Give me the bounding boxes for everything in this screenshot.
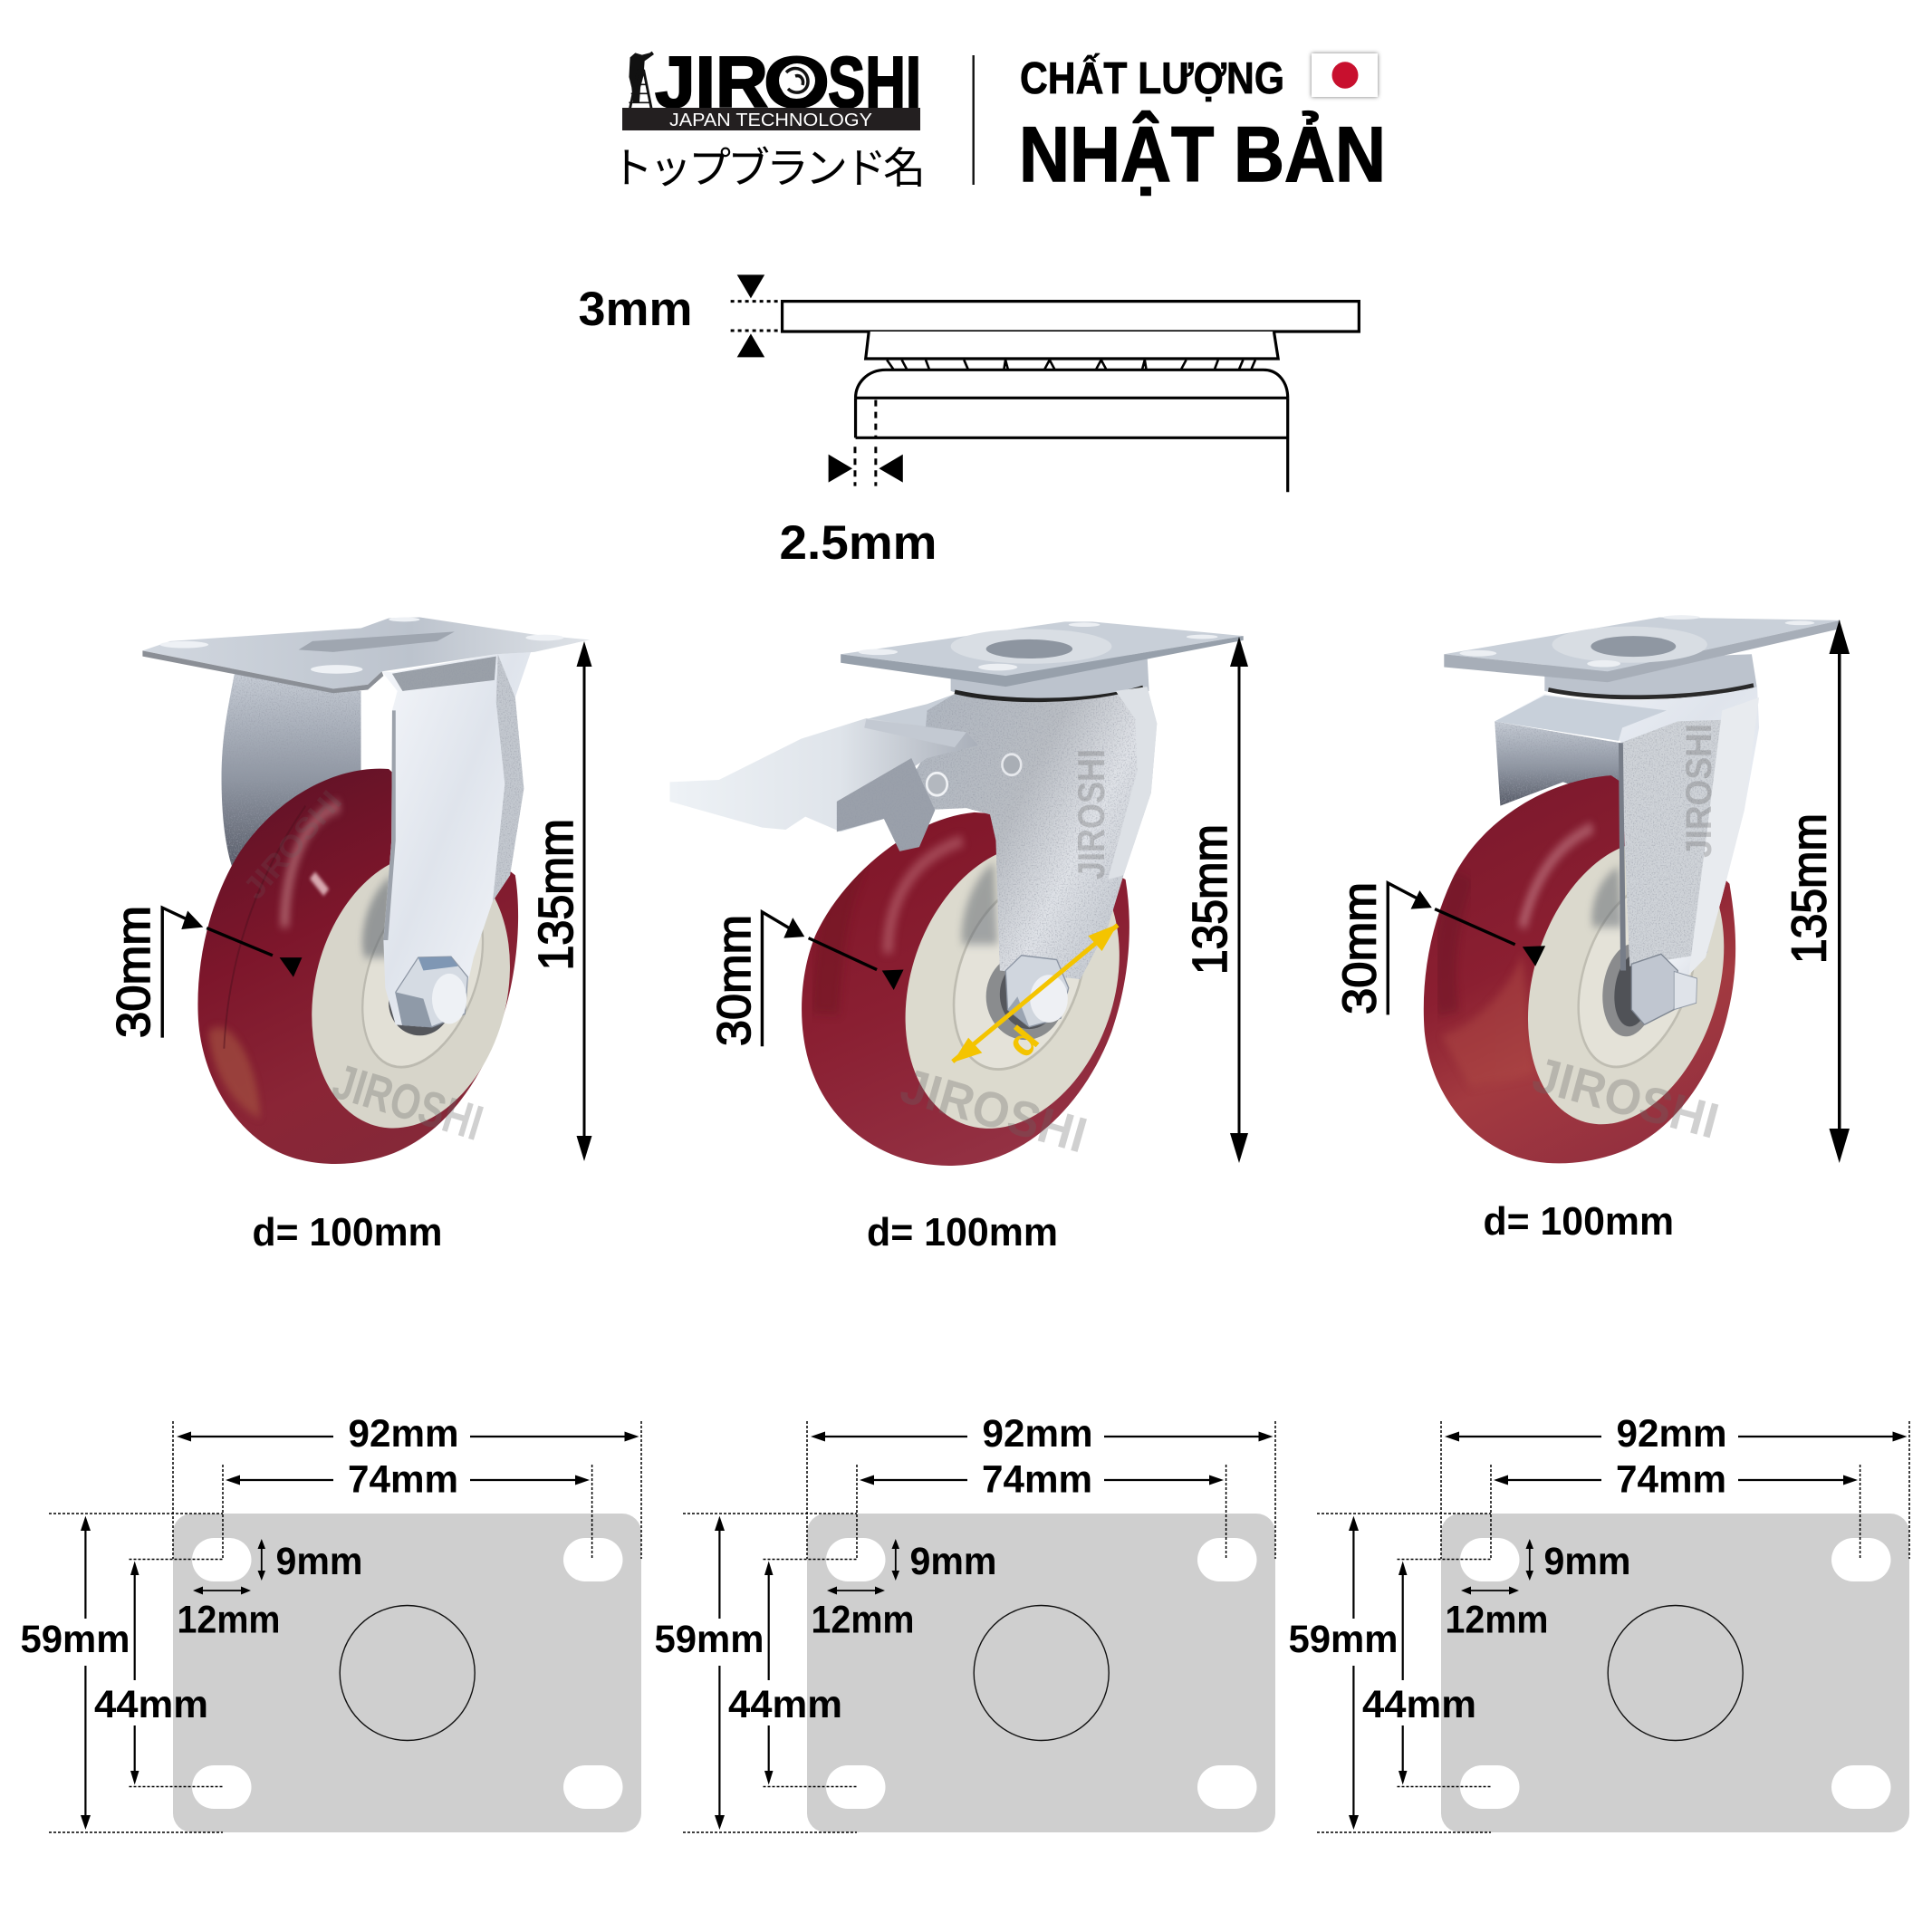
dimension: 59mm (1288, 1516, 1399, 1830)
logo tagline: JAPAN TECHNOLOGY (669, 111, 872, 130)
dimension: 135mm height (1783, 620, 1850, 1163)
dimension: 12mm: 12mm (812, 1598, 915, 1641)
dimension: 92mm (1445, 1412, 1908, 1456)
profile drawing (731, 274, 1359, 492)
caster photo: swivel (1424, 615, 1841, 1163)
panel: mounting plate 3 (1288, 1412, 1909, 1832)
divider (973, 55, 975, 185)
label: yellow d: d (998, 1018, 1048, 1065)
dimension: 135mm height (1183, 637, 1248, 1163)
wheel watermark: JIROSHI (1527, 1046, 1725, 1149)
dimension: 30mm width (108, 906, 302, 1038)
dimension: 44mm (1362, 1562, 1476, 1784)
dimension: 92mm: 92mm (982, 1412, 1092, 1456)
dimension: 135mm height: 135mm (529, 819, 583, 971)
tire watermark: JIROSHI (236, 784, 349, 906)
panel: mounting plate 2 (654, 1412, 1275, 1832)
logo wordmark O with swirl: O (764, 42, 830, 122)
dimension: 74mm (860, 1458, 1224, 1502)
dimension: 59mm: 59mm (1288, 1618, 1399, 1661)
plate shape (173, 1514, 641, 1832)
panel: mounting plate 1 (20, 1412, 641, 1832)
dimension: 30mm width (1333, 882, 1545, 1014)
dimension: 92mm: 92mm (1616, 1412, 1726, 1456)
guide lines (683, 1421, 1275, 1832)
dimension: 74mm (226, 1458, 590, 1502)
japanese tagline: トップブランド名 (610, 144, 926, 192)
dimension: 74mm: 74mm (982, 1458, 1092, 1502)
dimension: 59mm (654, 1516, 764, 1830)
dimension: 59mm: 59mm (654, 1618, 764, 1661)
plate shape (1441, 1514, 1909, 1832)
dimension: 92mm (177, 1412, 639, 1456)
heading: nhật bản: NHẬT BẢN (1019, 111, 1386, 198)
logo wordmark SHI: SHI (828, 42, 921, 122)
dimension: 44mm: 44mm (94, 1683, 208, 1726)
dimension: 12mm: 12mm (178, 1598, 281, 1641)
section profile diagram: plate and wheel thickness (578, 274, 1359, 570)
dimension: 9mm: 9mm (909, 1540, 996, 1583)
panel: swivel caster (1333, 615, 1850, 1244)
dimension: 74mm (1494, 1458, 1858, 1502)
icon: japan flag (1312, 53, 1378, 97)
dimension: 44mm (728, 1562, 842, 1784)
label: diameter: d= 100mm (252, 1210, 442, 1254)
panel: swivel caster with brake (670, 621, 1248, 1254)
header: brand and quality badge (610, 42, 1386, 198)
caster photo: fixed (142, 618, 590, 1174)
dimension: 135mm height: 135mm (1783, 813, 1837, 964)
dimension: 44mm: 44mm (1362, 1683, 1476, 1726)
dimension: 92mm: 92mm (348, 1412, 458, 1456)
wheel watermark: JIROSHI (895, 1057, 1093, 1163)
panel: fixed caster (108, 618, 592, 1254)
dimension: 9mm: 9mm (275, 1540, 362, 1583)
dimension: 74mm: 74mm (348, 1458, 458, 1502)
plate shape (807, 1514, 1275, 1832)
logo bar (622, 108, 920, 130)
logo icon: man on ladder (627, 52, 654, 118)
label: 2.5mm: 2.5mm (779, 516, 937, 570)
logo: JIROSHI (622, 42, 921, 130)
bracket watermark: JIROSHI (1070, 749, 1112, 879)
guide lines (49, 1421, 641, 1832)
dimension: 59mm: 59mm (20, 1618, 130, 1661)
guide lines (1317, 1421, 1909, 1832)
logo wordmark JIR: JIR (655, 42, 768, 122)
dimension: 74mm: 74mm (1616, 1458, 1726, 1502)
label: diameter: d= 100mm (1484, 1199, 1674, 1244)
dimension: 44mm: 44mm (728, 1683, 842, 1726)
dimension: 92mm (811, 1412, 1274, 1456)
caster photo: brake (670, 621, 1244, 1168)
label: diameter: d= 100mm (867, 1210, 1058, 1254)
dimension: 30mm width (708, 912, 904, 1046)
heading: chất lượng: CHẤT LƯỢNG (1020, 54, 1284, 103)
dimension: 30mm width: 30mm (108, 906, 160, 1038)
wheel watermark: JIROSHI (326, 1053, 489, 1151)
dimension: 135mm height (529, 641, 592, 1161)
dimension: 30mm width: 30mm (708, 915, 761, 1046)
bracket watermark: JIROSHI (1679, 724, 1719, 858)
dimension: 59mm (20, 1516, 130, 1830)
dimension: 44mm (94, 1562, 208, 1784)
label: 3mm: 3mm (578, 283, 692, 336)
dimension: 9mm: 9mm (1543, 1540, 1630, 1583)
dimension: 30mm width: 30mm (1333, 882, 1386, 1014)
dimension: 135mm height: 135mm (1183, 824, 1237, 975)
dimension: 12mm: 12mm (1446, 1598, 1549, 1641)
